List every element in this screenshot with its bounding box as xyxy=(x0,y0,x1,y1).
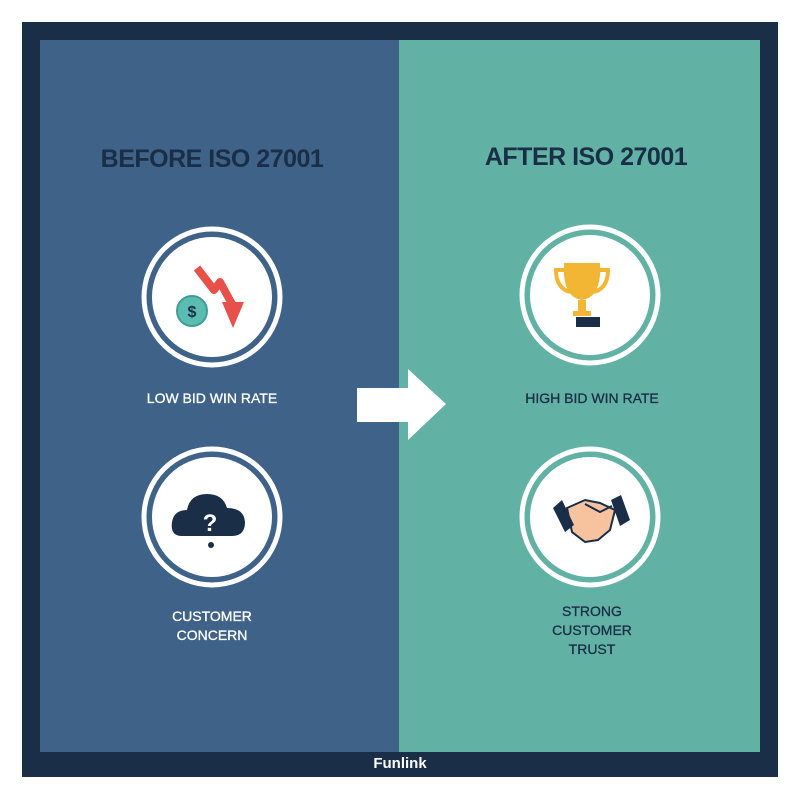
icon: trophy xyxy=(522,227,658,363)
icon: handshake xyxy=(522,449,658,585)
label: customer concern: CONCERN xyxy=(177,627,247,643)
panel: after xyxy=(399,40,760,752)
label: high bid win rate: HIGH BID WIN RATE xyxy=(525,390,659,406)
label: low bid win rate: LOW BID WIN RATE xyxy=(147,390,277,406)
icon: cloud question: ? xyxy=(203,510,217,537)
label: strong customer trust: STRONG xyxy=(562,603,622,619)
label: customer concern: CUSTOMER xyxy=(172,608,252,624)
label: strong customer trust: CUSTOMER xyxy=(552,622,632,638)
heading: before: BEFORE ISO 27001 xyxy=(101,145,323,173)
footer brand: Funlink xyxy=(373,755,427,772)
label: strong customer trust: TRUST xyxy=(569,641,615,657)
label: strong customer trust xyxy=(552,603,632,657)
heading: after: AFTER ISO 27001 xyxy=(485,143,687,171)
icon: low bid win rate: $ xyxy=(188,304,197,321)
icon: cloud question xyxy=(144,449,280,585)
icon: low bid win rate xyxy=(144,229,280,365)
panel: before xyxy=(40,40,399,752)
arrow xyxy=(357,369,446,440)
label: customer concern xyxy=(172,608,252,643)
